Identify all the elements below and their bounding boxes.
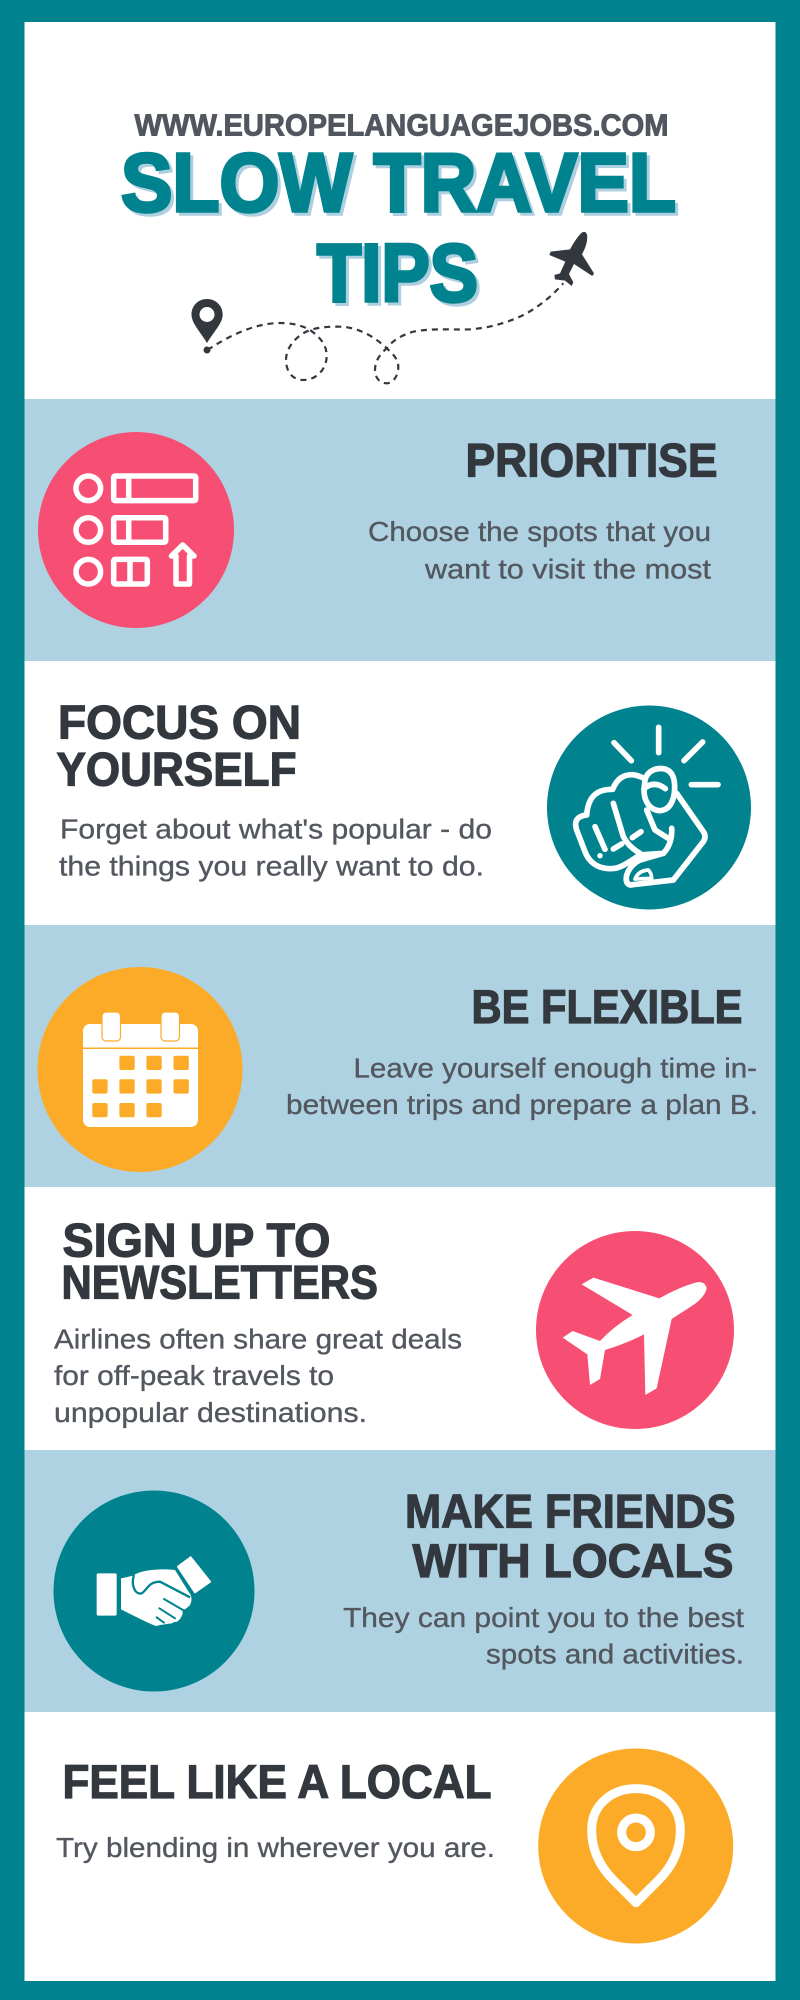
panel: sign up to newsletters <box>24 1187 776 1450</box>
heading: WITH LOCALS <box>412 1535 734 1588</box>
band background <box>24 661 776 925</box>
body text <box>286 1052 758 1120</box>
title shadow: TIPS <box>320 231 481 322</box>
body text: unpopular destinations. <box>54 1397 367 1428</box>
body text <box>343 1602 744 1670</box>
band background <box>24 925 776 1187</box>
header panel <box>24 22 776 399</box>
heading: PRIORITISE <box>466 434 718 488</box>
band background <box>24 399 776 661</box>
heading: FEEL LIKE A LOCAL <box>62 1756 492 1809</box>
body text: between trips and prepare a plan B. <box>286 1089 758 1120</box>
band background <box>24 1450 776 1712</box>
icon: handshake <box>54 1490 254 1692</box>
dashed flight path <box>207 283 563 383</box>
body text <box>59 814 492 882</box>
icon: prioritised checklist <box>38 432 234 628</box>
body text <box>368 516 711 584</box>
title <box>121 136 676 319</box>
body text: want to visit the most <box>424 554 711 584</box>
title shadow <box>124 139 679 322</box>
body text: They can point you to the best <box>343 1602 744 1633</box>
body text: Leave yourself enough time in- <box>354 1052 757 1084</box>
body text: Choose the spots that you <box>368 516 711 547</box>
heading <box>62 1214 378 1310</box>
panel: be flexible <box>24 925 776 1187</box>
band background <box>24 1187 776 1450</box>
panel: prioritise <box>24 399 776 661</box>
heading: BE FLEXIBLE <box>472 981 742 1034</box>
icon: location pin <box>538 1748 733 1944</box>
heading: NEWSLETTERS <box>62 1256 378 1310</box>
panel: feel like a local <box>24 1712 776 1981</box>
header background <box>24 22 776 399</box>
body text: Airlines often share great deals <box>54 1324 462 1354</box>
icon: airplane <box>536 1231 734 1429</box>
title: SLOW TRAVEL <box>121 136 676 229</box>
heading: FOCUS ON <box>58 696 301 750</box>
title: TIPS <box>317 228 478 319</box>
band background <box>24 1712 776 1981</box>
icon: small plane <box>549 232 594 286</box>
body text: Forget about what's popular - do <box>60 814 492 844</box>
body text: the things you really want to do. <box>59 850 484 882</box>
title shadow: SLOW TRAVEL <box>124 139 679 232</box>
heading: SIGN UP TO <box>62 1214 330 1268</box>
body text <box>54 1324 462 1428</box>
icon: map pin <box>192 299 223 354</box>
icon: pointing hand <box>547 706 751 910</box>
panel: make friends with locals <box>24 1450 776 1712</box>
heading: MAKE FRIENDS <box>405 1486 736 1538</box>
body text: spots and activities. <box>486 1638 744 1670</box>
body text: Try blending in wherever you are. <box>56 1832 495 1863</box>
heading: YOURSELF <box>56 744 296 796</box>
website url: WWW.EUROPELANGUAGEJOBS.COM <box>134 108 668 143</box>
icon: calendar <box>38 967 242 1172</box>
panel: focus on yourself <box>24 661 776 925</box>
body text: for off-peak travels to <box>54 1360 334 1391</box>
heading <box>56 696 301 796</box>
heading <box>405 1486 736 1588</box>
